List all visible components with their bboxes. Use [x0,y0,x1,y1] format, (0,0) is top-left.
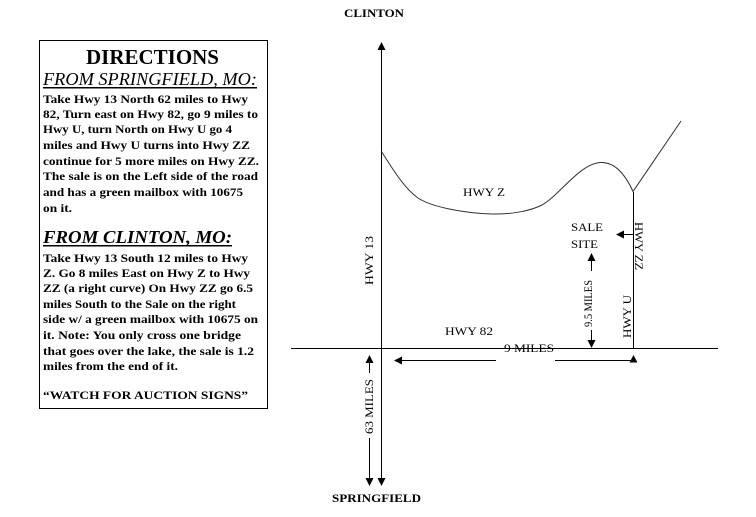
label: Clinton: CLINTON [344,6,404,20]
text block: Springfield directions: Hwy U, turn North on Hwy U go 4 [43,122,232,136]
label: sale site: SALE [571,220,603,234]
text block: Clinton directions: it. Note: You only cross one bridge [43,328,242,342]
text block: Clinton directions: side w/ a green mailbox with 10675 on [43,312,258,326]
heading: from Clinton: FROM CLINTON, MO: [42,227,232,247]
panel: directions [40,40,268,408]
label: Hwy ZZ: HWY ZZ [632,222,646,270]
text block: Clinton directions: miles from the end of it. [43,359,178,373]
text block: Springfield directions [43,92,259,215]
arrow: 9 miles left [394,356,496,364]
label: 63 miles: 63 MILES [362,379,376,434]
text block: Springfield directions: The sale is on the Left side of the road [43,169,258,183]
road: Hwy 82 [291,348,718,349]
text block: Clinton directions: that goes over the lake, the sale is 1.2 [43,344,254,358]
road: Hwy Z curve [382,121,681,214]
arrow: 9 miles right [555,355,638,362]
callout: watch for auction signs: “WATCH FOR AUCTION SIGNS” [43,388,248,402]
arrow: 9.5 miles up [588,253,596,271]
map: road diagram [291,6,718,505]
arrow: 63 miles down [366,438,374,486]
text block: Springfield directions: and has a green mailbox with 10675 [43,185,243,199]
text block: Springfield directions: on it. [43,201,72,215]
label: Hwy 82: HWY 82 [445,324,493,338]
label: Springfield: SPRINGFIELD [332,491,421,505]
text block: Clinton directions: Take Hwy 13 South 12 miles to Hwy [43,251,248,265]
label: 9 miles: 9 MILES [504,341,554,355]
arrow: 9.5 miles down [588,330,596,348]
heading: directions: DIRECTIONS [86,45,219,69]
heading: from Springfield: FROM SPRINGFIELD, MO: [42,69,257,89]
text block: Clinton directions: miles South to the Sale on the right [43,297,236,311]
text block: Springfield directions: miles and Hwy U turns into Hwy ZZ [43,138,250,152]
label: sale site [571,220,603,251]
label: 9.5 miles: 9.5 MILES [581,280,595,327]
text block: Clinton directions: ZZ (a right curve) On Hwy ZZ go 6.5 [43,281,253,295]
text block: Springfield directions: 82, Turn east on Hwy 82, go 9 miles to [43,107,258,121]
label: Hwy U: HWY U [620,295,634,338]
text block: Springfield directions: continue for 5 more miles on Hwy ZZ. [43,154,259,168]
label: sale site: SITE [571,237,598,251]
text block: Clinton directions [43,251,258,373]
road: Hwy 13 with arrows [378,42,386,486]
road: Hwy U and ZZ [633,192,634,349]
arrow: to sale site [616,230,633,238]
text block: Springfield directions: Take Hwy 13 North 62 miles to Hwy [43,92,248,106]
label: Hwy 13: HWY 13 [362,236,376,285]
arrow: 63 miles up [366,355,374,373]
label: Hwy Z: HWY Z [463,185,505,199]
text block: Clinton directions: Z. Go 8 miles East on Hwy Z to Hwy [43,266,250,280]
